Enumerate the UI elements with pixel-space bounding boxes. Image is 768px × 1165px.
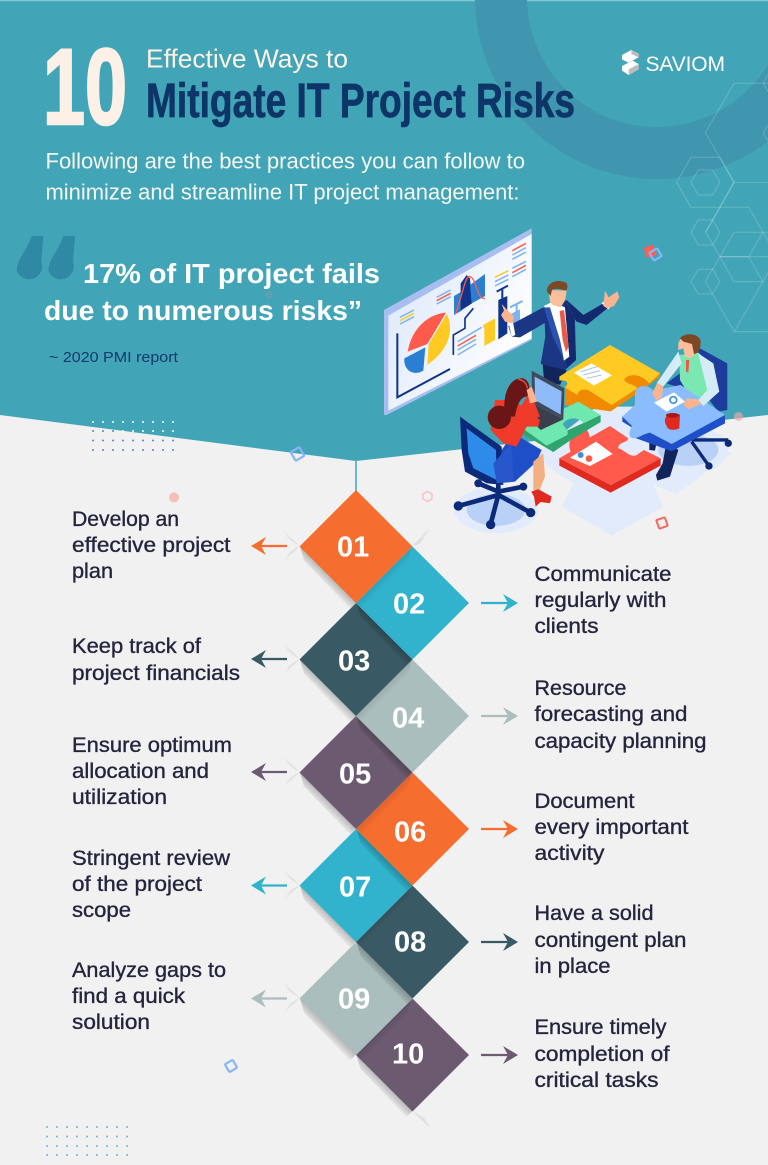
step 08 diamond [356, 886, 469, 1004]
step 06 diamond [356, 772, 469, 891]
step 07 text: of the project [72, 873, 202, 896]
illustration: team solving a puzzle [384, 228, 732, 536]
step numbers [337, 532, 426, 1070]
connector line [355, 461, 357, 491]
step 04 text: Resource [534, 677, 626, 700]
intro text: Following are the best practices you can follow to [46, 148, 525, 174]
decoration: bottom dots [46, 1126, 128, 1156]
step 10 text: critical tasks [534, 1069, 658, 1092]
step 05 diamond [300, 716, 412, 834]
step 08 text [534, 902, 686, 978]
step numbers: 02 [393, 588, 425, 620]
left chair base [454, 479, 535, 529]
step 06 text [534, 790, 689, 865]
step 06 text: Document [534, 790, 635, 813]
seated man: arms and hands [652, 352, 719, 409]
step 09 text: solution [72, 1011, 150, 1034]
header: teal banner [0, 0, 768, 461]
step numbers: 05 [339, 758, 371, 790]
step 04 text: capacity planning [534, 730, 706, 753]
step 05 text: Ensure optimum [72, 734, 232, 757]
green puzzle and laptop [520, 371, 601, 452]
decoration: small shapes [169, 245, 743, 1072]
step 09 text: Analyze gaps to [72, 959, 226, 982]
step 08 text: Have a solid [534, 902, 654, 925]
step 05 text [72, 734, 232, 809]
step 04 text [534, 677, 706, 753]
step 03 diamond [300, 603, 412, 722]
step 02 text: clients [534, 615, 598, 638]
step 03 text [72, 635, 240, 685]
step 07 text: Stringent review [72, 847, 231, 870]
arrows: left [251, 537, 287, 1008]
step 02 text: regularly with [534, 589, 666, 612]
step 01 text: plan [72, 560, 113, 583]
step 10 text: completion of [534, 1043, 670, 1066]
step 05 text: allocation and [72, 760, 209, 783]
step 10 text [534, 1016, 670, 1092]
step 10 diamond [356, 998, 469, 1117]
step numbers: 09 [338, 984, 370, 1016]
step 05 text: utilization [72, 786, 167, 809]
step diagram: diamonds [282, 490, 469, 1129]
step 07 text [72, 847, 231, 922]
step 02 diamond [356, 546, 469, 665]
step 09 diamond [300, 942, 412, 1060]
intro text: minimize and streamline IT project management: [46, 180, 520, 204]
step numbers: 03 [338, 646, 370, 678]
step numbers: 07 [339, 872, 371, 904]
step 01 text [72, 508, 231, 583]
step 01 text: Develop an [72, 508, 179, 531]
floor shadow [454, 407, 732, 536]
puzzle piece: red [559, 426, 661, 493]
step 09 text: find a quick [72, 985, 186, 1008]
heading line: Effective Ways to: Effective Ways to [146, 44, 348, 74]
step 01 diamond [300, 490, 412, 608]
step 06 text: activity [534, 842, 605, 865]
puzzle piece: yellow [559, 345, 660, 411]
step 04 text: forecasting and [534, 703, 688, 726]
seated man: chair, legs and torso [649, 334, 732, 481]
step 03 text: project financials [72, 662, 240, 685]
step 07 text: scope [72, 899, 131, 922]
intro text [46, 148, 525, 204]
step numbers: 06 [394, 816, 426, 848]
heading line: Mitigate IT Project Risks: Mitigate IT Project Risks [146, 75, 575, 128]
quote text [44, 258, 380, 326]
presentation board [384, 228, 532, 415]
step 08 text: contingent plan [534, 929, 686, 952]
step 01 text: effective project [72, 534, 231, 557]
step numbers: 01 [337, 532, 369, 564]
step 02 text: Communicate [534, 563, 672, 586]
step numbers: 08 [394, 926, 426, 958]
step 07 diamond [300, 829, 412, 948]
step 06 text: every important [534, 816, 689, 839]
quote text: 17% of IT project fails [83, 258, 380, 289]
puzzle piece: blue [622, 385, 725, 451]
step numbers: 10 [392, 1038, 424, 1070]
presenter [501, 281, 619, 385]
large number 10: 10 [43, 26, 127, 147]
quote text: due to numerous risks” [44, 295, 362, 326]
step 10 text: Ensure timely [534, 1016, 667, 1039]
step numbers: 04 [392, 702, 424, 734]
decoration: top dots [92, 421, 174, 451]
step 02 text [534, 563, 672, 638]
step 04 diamond [356, 660, 469, 778]
step 09 text [72, 959, 226, 1034]
arrows: right [481, 594, 518, 1064]
woman at laptop [460, 378, 552, 507]
step 08 text: in place [534, 955, 610, 978]
step 03 text: Keep track of [72, 635, 201, 658]
logo: Saviom: SAVIOM [646, 53, 725, 76]
icon: quote mark [17, 236, 75, 279]
quote source: ~ 2020 PMI report [49, 350, 178, 366]
decoration: ring [501, 0, 768, 153]
decoration: hexagon network [677, 75, 768, 332]
logo: Saviom [622, 50, 725, 76]
corner highlights [282, 528, 431, 1129]
